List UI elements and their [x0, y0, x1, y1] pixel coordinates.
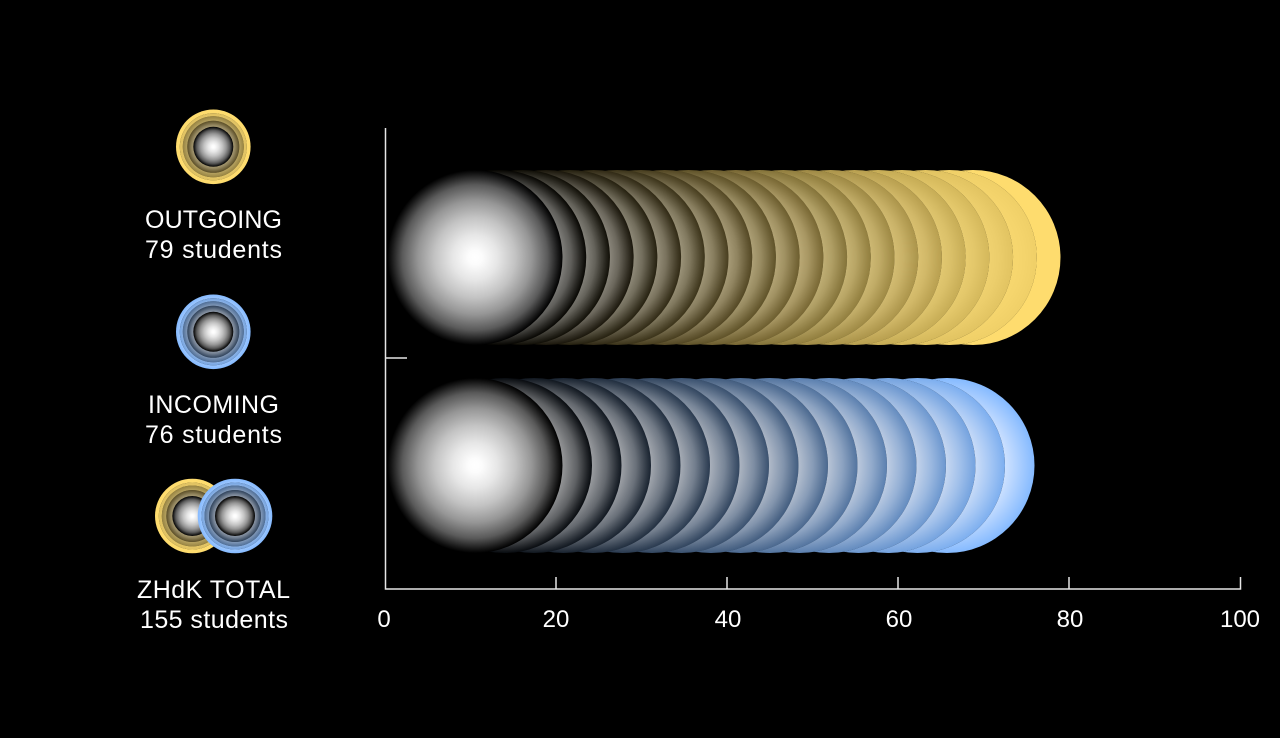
icon: total: [155, 479, 272, 553]
axes: [386, 128, 1240, 589]
axis labels: 0: [377, 606, 391, 633]
axis labels: 80: [1057, 606, 1083, 633]
axis labels: 100: [1220, 606, 1260, 633]
label: total: 155 students: [140, 606, 288, 634]
axis labels: [377, 606, 1260, 633]
label: incoming: 76 students: [145, 421, 282, 449]
label: outgoing: 79 students: [145, 236, 282, 264]
icon: outgoing: [176, 110, 251, 184]
axis labels: 20: [543, 606, 569, 633]
label: total: [137, 576, 290, 634]
label: incoming: [145, 391, 282, 449]
label: outgoing: [145, 206, 282, 264]
label: outgoing: OUTGOING: [145, 206, 282, 234]
bar: outgoing 79 students: [388, 170, 1060, 345]
axis labels: 60: [886, 606, 912, 633]
label: incoming: INCOMING: [148, 391, 279, 419]
icon: incoming: [176, 294, 251, 369]
bar: incoming 76 students: [388, 378, 1034, 553]
axis labels: 40: [715, 606, 741, 633]
label: total: ZHdK TOTAL: [137, 576, 290, 604]
